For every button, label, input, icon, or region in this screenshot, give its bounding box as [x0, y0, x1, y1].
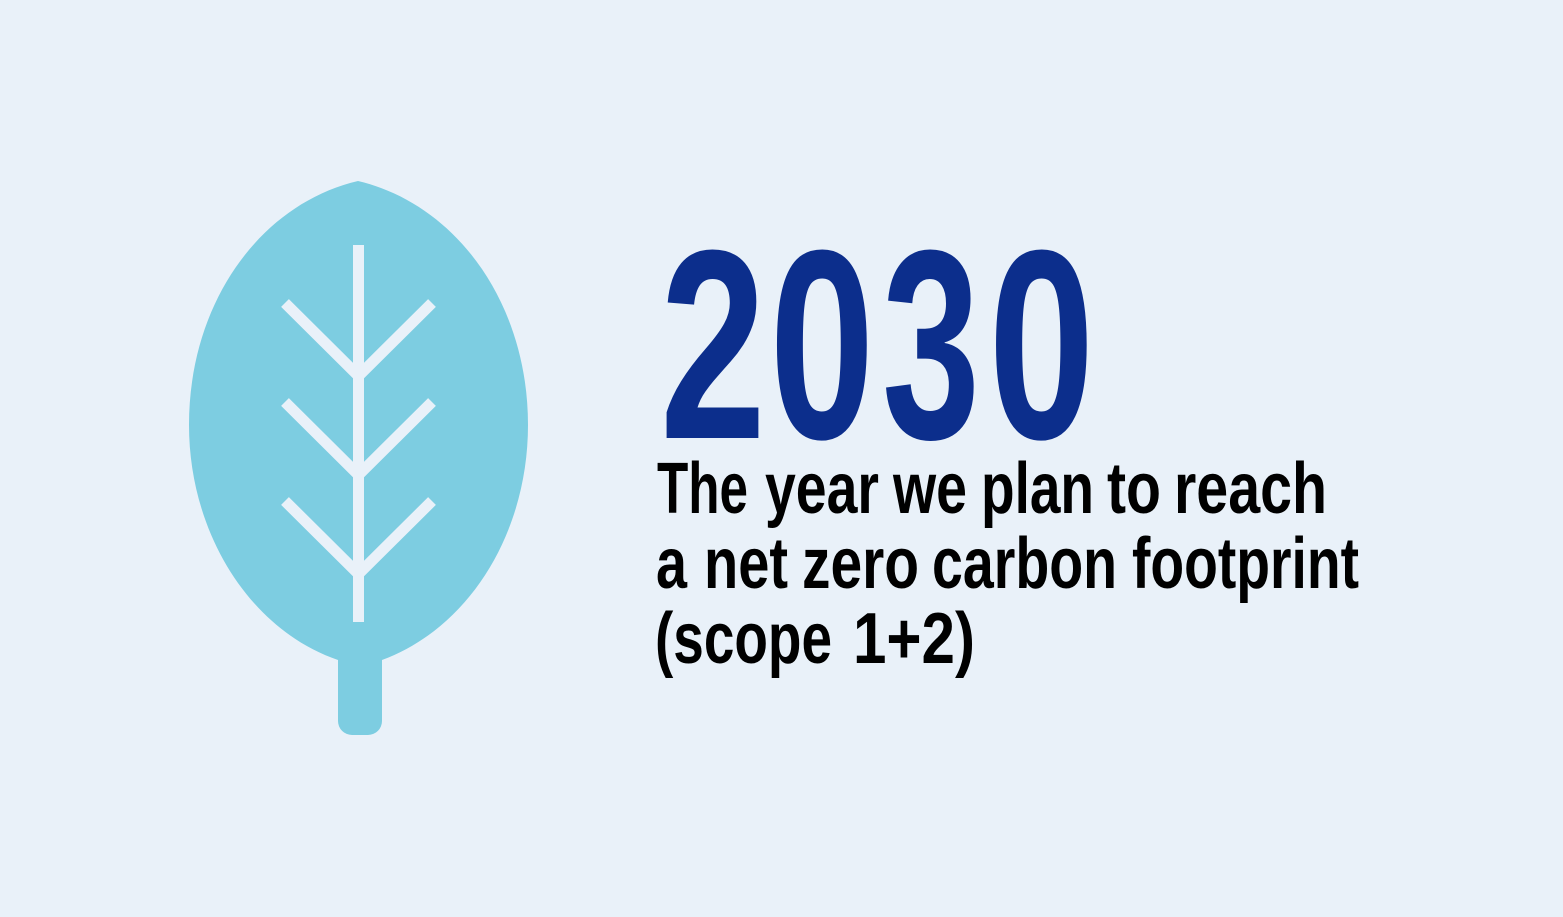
- big number: 2030: [660, 195, 1094, 496]
- line 1: year: [765, 449, 879, 529]
- line 2: [656, 524, 1359, 604]
- line 2: net: [704, 524, 788, 604]
- big number: 2030: 0: [988, 195, 1094, 496]
- icon: leaf: [189, 181, 528, 735]
- big number: 2030: 2: [660, 195, 766, 496]
- line 3: 1+2): [853, 599, 975, 679]
- line 3: (scope: [655, 599, 832, 679]
- leaf body and stem: [189, 181, 528, 735]
- line 1: The: [657, 449, 748, 529]
- line 1: [657, 449, 1327, 529]
- line 2: zero: [802, 524, 919, 604]
- big number: 2030: 3: [882, 195, 980, 496]
- big number: 2030: 0: [770, 195, 874, 496]
- leaf veins: [285, 245, 432, 622]
- line 1: reach: [1174, 449, 1327, 529]
- line 2: a: [656, 524, 688, 604]
- description text: [655, 449, 1359, 679]
- line 2: carbon: [932, 524, 1117, 604]
- line 1: to: [1107, 449, 1161, 529]
- line 1: we: [892, 449, 967, 529]
- line 2: footprint: [1132, 524, 1359, 604]
- line 1: plan: [981, 449, 1094, 529]
